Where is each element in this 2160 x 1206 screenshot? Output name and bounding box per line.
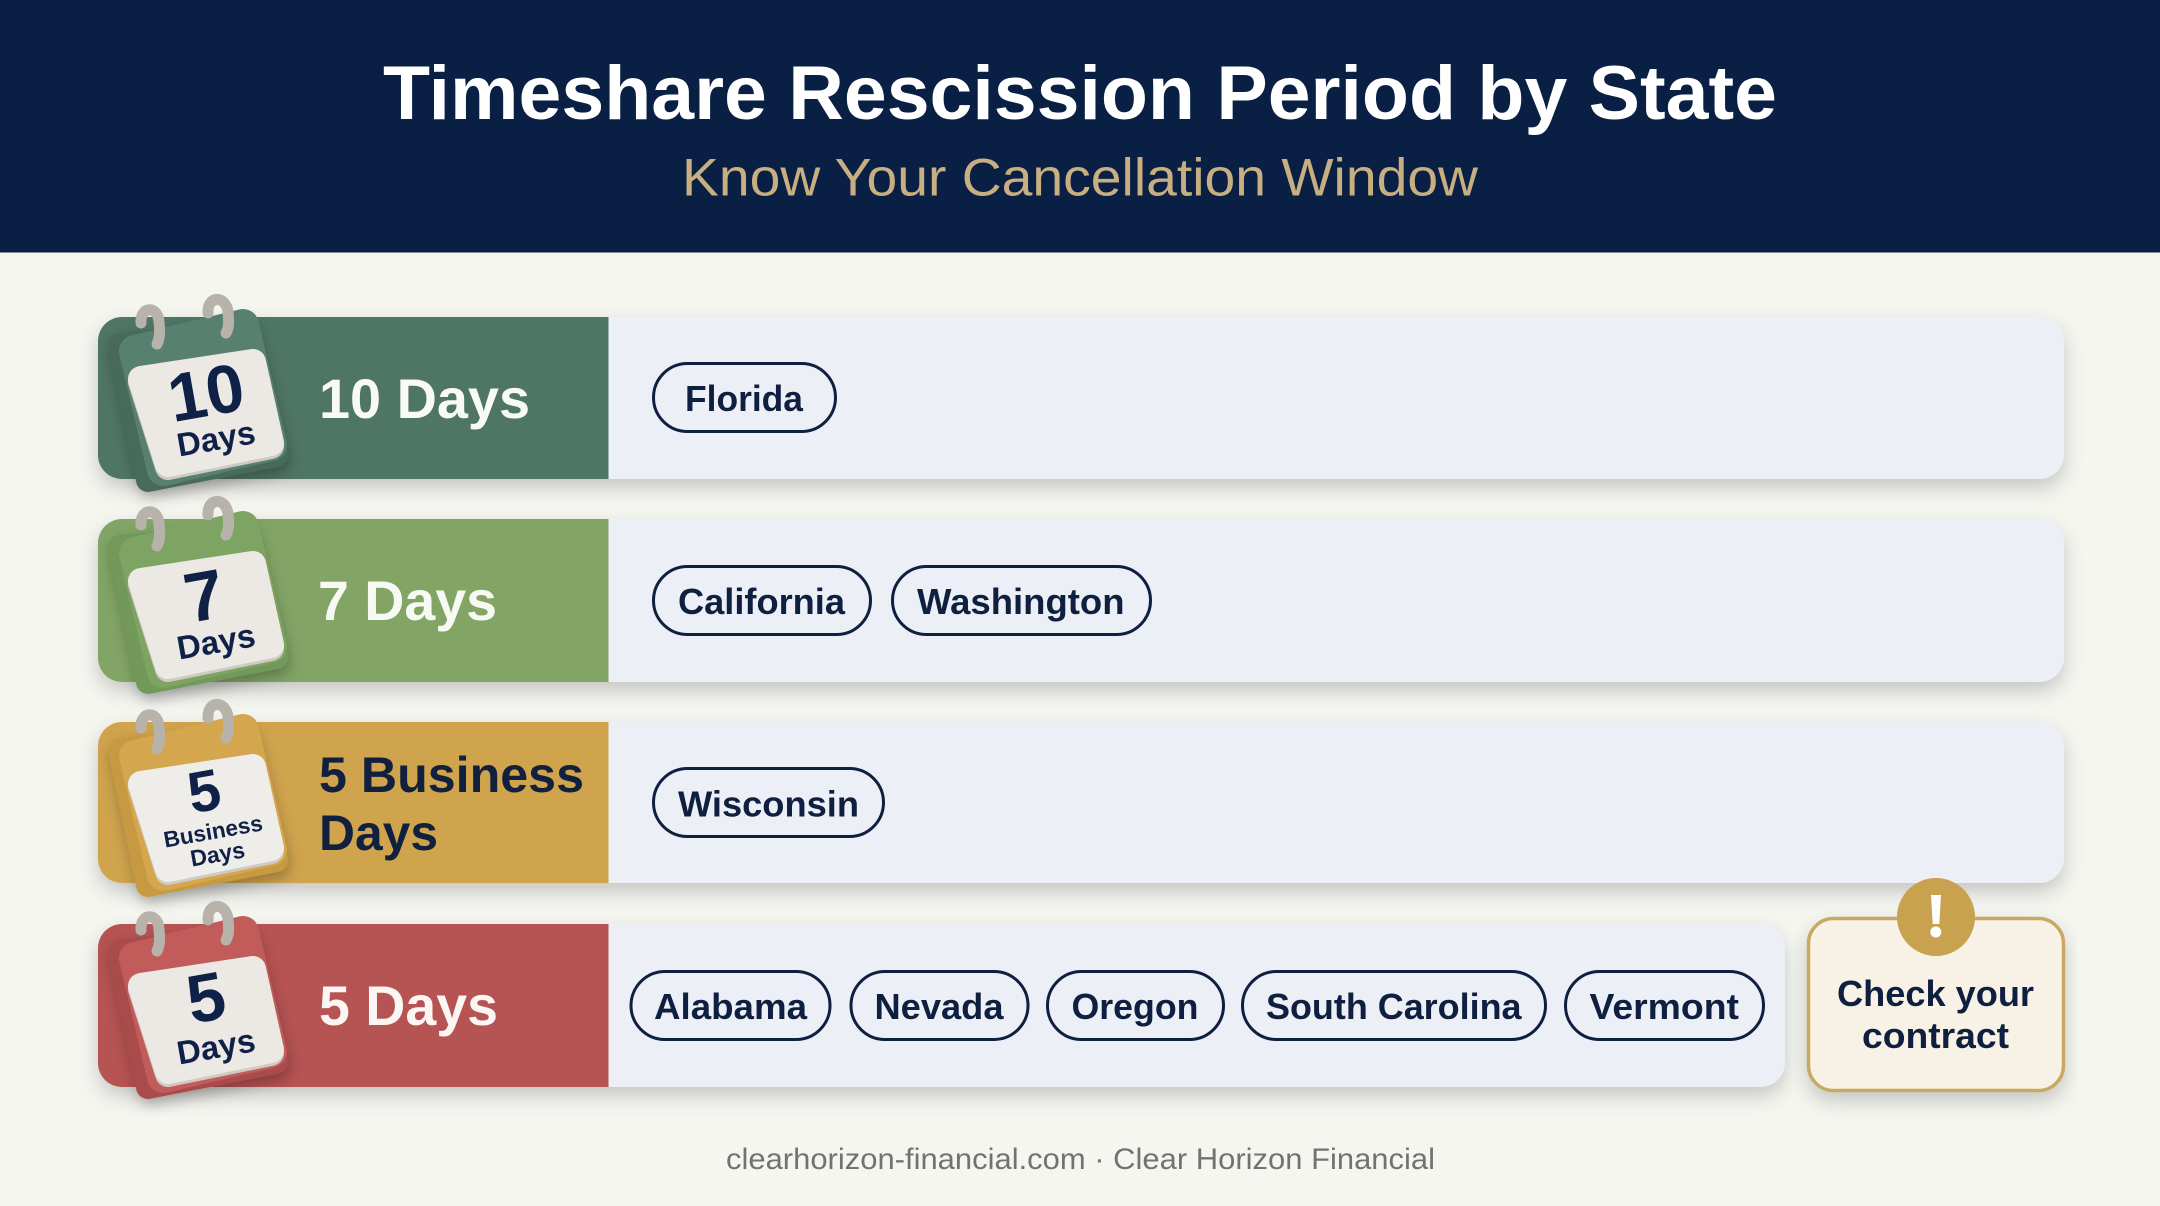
icon: calendar 5 business days: Business (162, 810, 265, 852)
callout: check your contract (1808, 878, 2064, 1090)
pill: Florida (654, 364, 836, 432)
icon: calendar 5 business days: Days (188, 836, 247, 872)
pill: Alabama (631, 972, 830, 1040)
row panel (98, 722, 2064, 883)
footer: clearhorizon-financial.com · Clear Horizon Financial (726, 1143, 1435, 1176)
pill: South Carolina (1242, 972, 1546, 1040)
header banner (0, 0, 2160, 252)
subtitle: Know Your Cancellation Window (682, 148, 1479, 208)
pill: South Carolina: South Carolina (1266, 986, 1522, 1027)
row panel (98, 519, 2064, 682)
pill: California (654, 566, 870, 634)
pill: Alabama: Alabama (654, 986, 808, 1027)
row: 7 Days (98, 501, 2064, 682)
label: 5 Business Days (319, 747, 584, 861)
row: 5 Business Days (98, 704, 2064, 885)
callout text: contract (1862, 1015, 2009, 1056)
callout text: Check your (1837, 973, 2034, 1014)
row: 5 Days (98, 906, 1785, 1087)
label: 5 Business Days: 5 Business (319, 747, 584, 803)
row: 10 Days (98, 299, 2064, 480)
pill: Nevada (851, 972, 1028, 1040)
icon: calendar 10 days: Days (174, 413, 258, 464)
row panel (98, 924, 1785, 1087)
icon: calendar 10 days (120, 299, 276, 480)
label: 10 Days: 10 Days (319, 367, 530, 430)
callout text (1837, 973, 2034, 1056)
label: 7 Days: 7 Days (318, 569, 497, 632)
icon: calendar 5 business days (120, 704, 276, 885)
pill: Vermont (1566, 972, 1764, 1040)
pill: Oregon: Oregon (1072, 986, 1198, 1027)
icon: calendar 7 days (120, 501, 276, 682)
pill: Nevada: Nevada (874, 986, 1004, 1027)
title: Timeshare Rescission Period by State (383, 51, 1777, 136)
pill: Wisconsin: Wisconsin (678, 784, 859, 824)
icon: calendar 7 days: 7 (178, 554, 230, 638)
icon: calendar 5 days (120, 906, 276, 1087)
pill: California: California (678, 581, 846, 622)
label: 5 Business Days: Days (319, 805, 438, 861)
icon: calendar 7 days: Days (174, 616, 258, 667)
pill: Vermont: Vermont (1590, 986, 1739, 1027)
icon: calendar 5 business days: 5 (183, 757, 226, 826)
row panel (98, 317, 2064, 479)
icon: exclamation badge (1897, 878, 1975, 956)
pill: Oregon (1048, 972, 1224, 1040)
icon: calendar 5 days: Days (174, 1021, 258, 1072)
pill: Wisconsin (654, 768, 884, 836)
label: 5 Days: 5 Days (319, 974, 498, 1037)
pill: Florida: Florida (685, 378, 804, 419)
pill: Washington: Washington (917, 581, 1124, 622)
icon: calendar 10 days: 10 (162, 349, 250, 437)
pill: Washington (892, 566, 1150, 634)
icon: calendar 5 days: 5 (181, 957, 231, 1039)
